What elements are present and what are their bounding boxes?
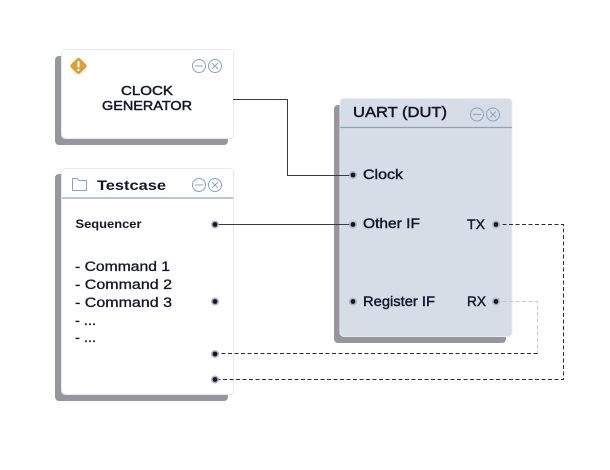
label: sequencer: Sequencer bbox=[76, 217, 142, 231]
heading: clock generator bbox=[102, 83, 192, 113]
heading: clock generator: CLOCK bbox=[121, 83, 173, 98]
panel: UART DUT bbox=[334, 98, 512, 343]
icon: minimise button bbox=[470, 108, 484, 121]
icon: close button bbox=[208, 60, 222, 72]
arrow: TX dashed connection bbox=[216, 224, 564, 380]
arrow: RX dashed connection bbox=[496, 302, 538, 354]
icon: close button bbox=[208, 178, 222, 192]
label: register IF: Register IF bbox=[363, 293, 435, 309]
arrow: clock connection bbox=[233, 100, 352, 176]
icon: minimise button bbox=[192, 60, 206, 72]
text block: commands: - Command 1 bbox=[75, 259, 170, 274]
icon: minimise button bbox=[192, 178, 206, 192]
label: TX: TX bbox=[467, 216, 486, 232]
label: clock: Clock bbox=[363, 166, 404, 182]
heading: UART (DUT): UART (DUT) bbox=[353, 105, 447, 121]
heading: clock generator: GENERATOR bbox=[102, 98, 192, 113]
text block: commands bbox=[75, 259, 172, 345]
icon: folder bbox=[72, 178, 86, 190]
icon: close button bbox=[486, 108, 500, 121]
panel: testcase bbox=[55, 168, 234, 401]
heading: testcase: Testcase bbox=[97, 177, 166, 193]
label: RX: RX bbox=[467, 293, 487, 309]
text block: commands: - ... bbox=[75, 330, 96, 345]
icon: warning bbox=[70, 58, 87, 74]
panel: clock generator bbox=[55, 50, 234, 145]
ports bbox=[212, 172, 499, 383]
label: other IF: Other IF bbox=[363, 215, 420, 231]
arrow: RX dashed return bbox=[216, 352, 538, 354]
text block: commands: - ... bbox=[75, 313, 96, 328]
text block: commands: - Command 3 bbox=[75, 295, 172, 310]
arrow: sequencer to other IF bbox=[215, 224, 353, 226]
text block: commands: - Command 2 bbox=[75, 277, 172, 292]
